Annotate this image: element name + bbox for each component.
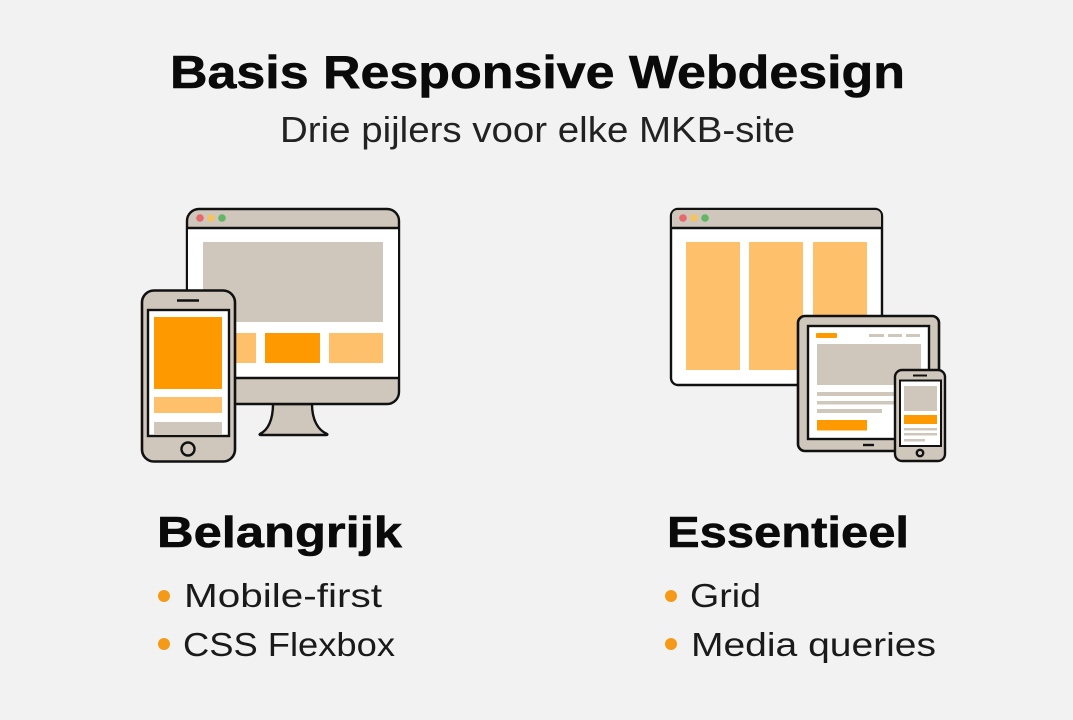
icon: monitor stand xyxy=(260,404,327,435)
bullet: Grid: Grid xyxy=(690,577,761,614)
bullet: Media queries: Media queries xyxy=(691,626,936,663)
title: Basis Responsive Webdesign xyxy=(170,46,905,98)
icon: smartphone xyxy=(142,290,235,462)
bullet: Grid xyxy=(665,577,761,614)
column: Essentieel xyxy=(665,508,936,663)
bullet: Mobile-first: Mobile-first xyxy=(184,577,382,614)
illustration: browser, tablet and phone xyxy=(671,209,945,461)
heading: Essentieel: Essentieel xyxy=(667,508,909,557)
icon: browser window xyxy=(671,209,882,385)
icon: desktop monitor xyxy=(187,209,399,404)
column: Belangrijk xyxy=(157,508,403,663)
heading: Belangrijk: Belangrijk xyxy=(157,508,403,557)
bullet: CSS Flexbox: CSS Flexbox xyxy=(183,626,396,663)
icon: tablet xyxy=(798,316,939,451)
subtitle: Drie pijlers voor elke MKB-site xyxy=(280,109,795,150)
icon: small phone xyxy=(895,370,945,461)
illustration: desktop and phone xyxy=(142,209,399,462)
